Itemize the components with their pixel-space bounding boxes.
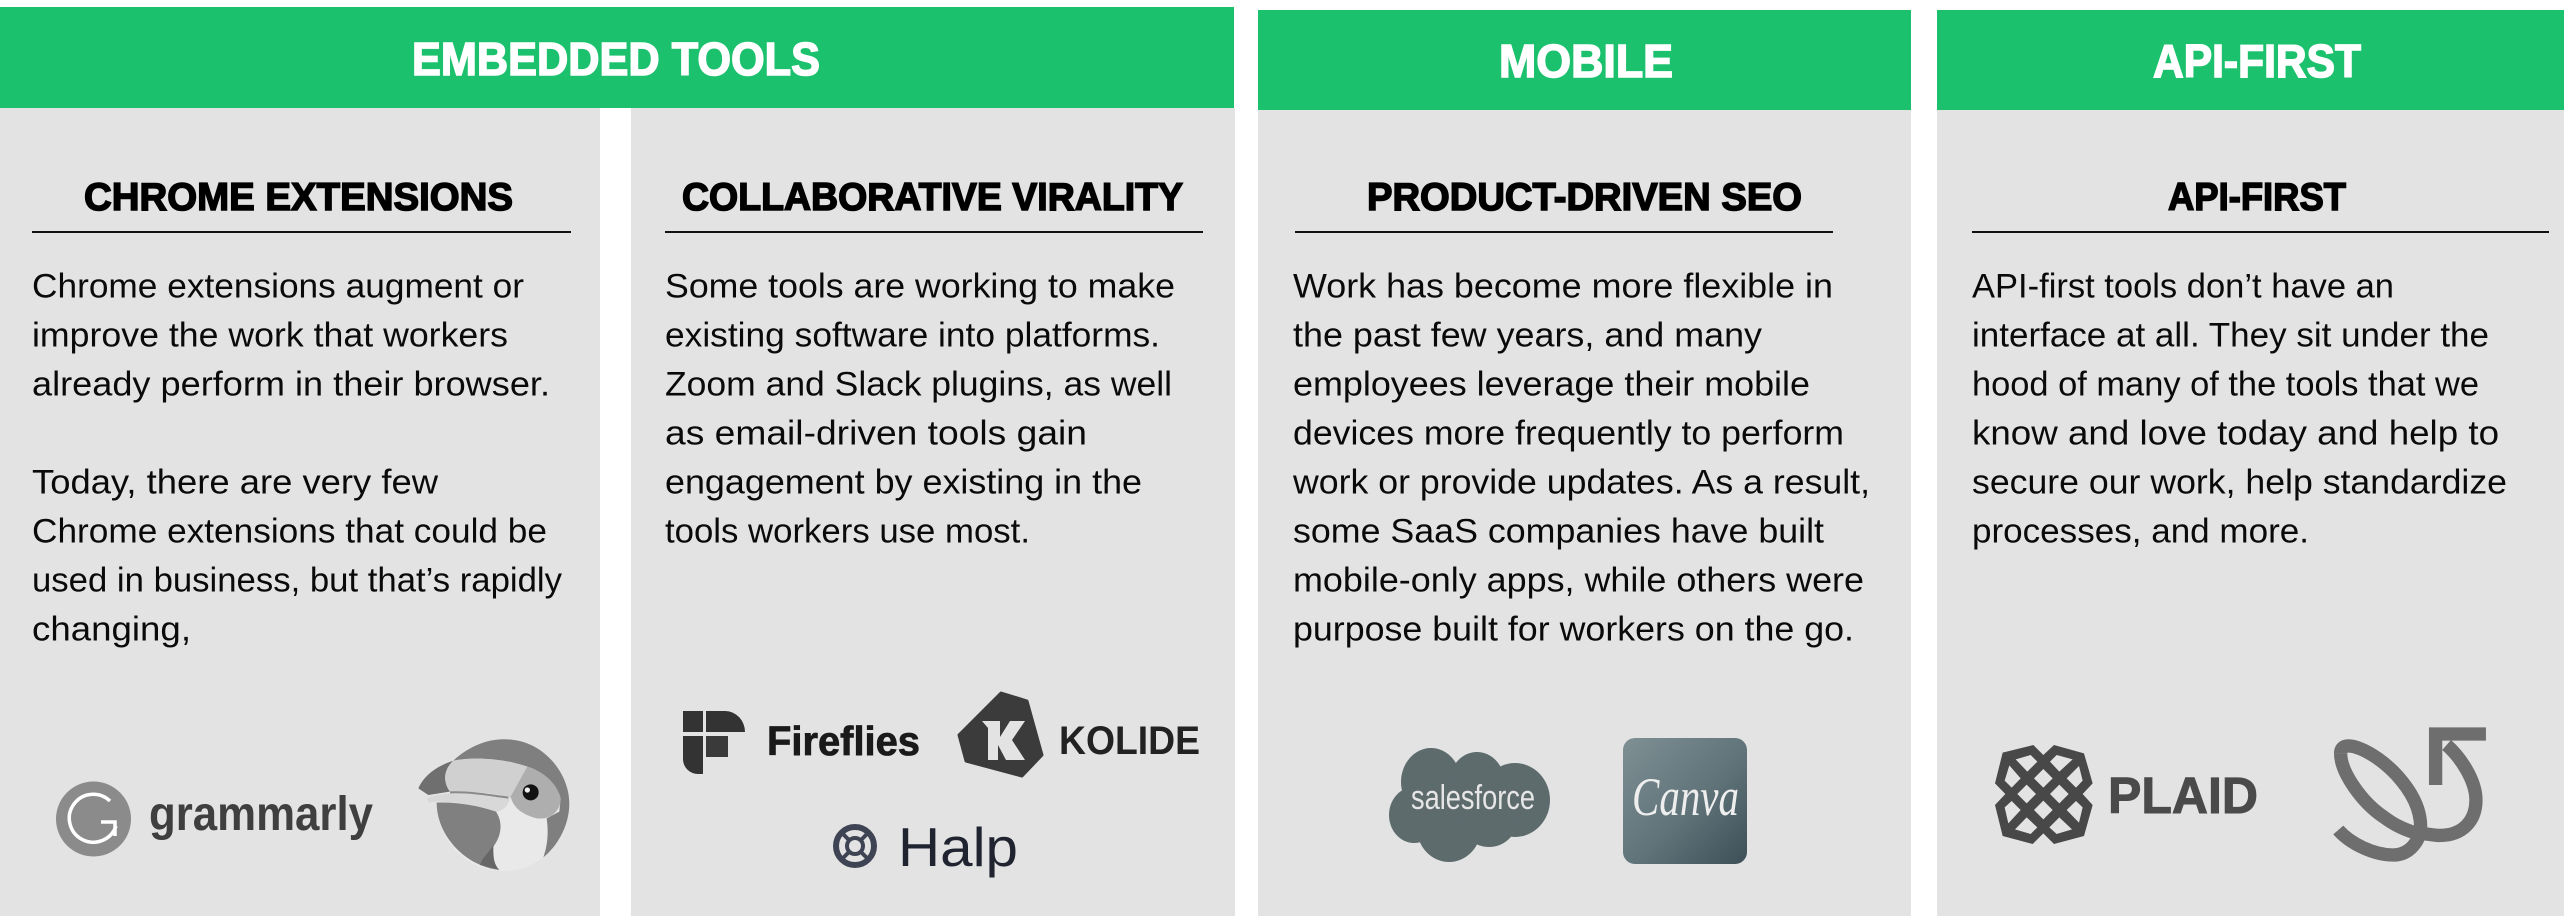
text: collaborative virality description: tools workers use most. <box>665 512 1030 550</box>
icon: kolide logo: KOLIDE <box>1059 719 1200 763</box>
text: collaborative virality description: existing software into platforms. <box>665 316 1160 354</box>
header: embedded tools <box>0 7 1234 108</box>
text: collaborative virality description <box>665 268 1175 550</box>
icon: kolide logo <box>959 693 1200 776</box>
text: collaborative virality description: engagement by existing in the <box>665 464 1142 502</box>
text: collaborative virality description: as email-driven tools gain <box>665 414 1087 452</box>
panel: api-first <box>1937 110 2564 916</box>
icon: plaid logo: PLAID <box>2108 767 2258 824</box>
icon: canva logo <box>1623 738 1747 864</box>
heading: product-driven seo: PRODUCT-DRIVEN SEO <box>1367 176 1802 219</box>
icon: fireflies logo <box>683 711 920 774</box>
text: chrome extensions description: improve the work that workers <box>32 316 508 354</box>
text: chrome extensions description <box>32 268 563 648</box>
text: api-first description: API-first tools don’t have an <box>1972 268 2394 306</box>
text: chrome extensions description: used in business, but that’s rapidly <box>32 562 563 600</box>
text: api-first description: interface at all. They sit under the <box>1972 316 2489 354</box>
text: chrome extensions description: Chrome extensions augment or <box>32 268 524 306</box>
heading: api-first: API-FIRST <box>2168 176 2346 219</box>
text: api-first description: secure our work, help standardize <box>1972 464 2507 502</box>
text: product-driven seo description: some SaaS companies have built <box>1293 512 1824 550</box>
text: product-driven seo description: devices more frequently to perform <box>1293 414 1844 452</box>
text: product-driven seo description: Work has become more flexible in <box>1293 268 1833 306</box>
text: collaborative virality description: Zoom and Slack plugins, as well <box>665 366 1172 404</box>
text: product-driven seo description: employees leverage their mobile <box>1293 366 1810 404</box>
header: api-first <box>1937 10 2564 110</box>
header: mobile: MOBILE <box>1499 35 1673 87</box>
icon: plaid logo <box>1995 745 2258 844</box>
icon: grammarly logo: grammarly <box>149 788 373 841</box>
text: api-first description <box>1972 268 2507 550</box>
heading: chrome extensions: CHROME EXTENSIONS <box>84 176 513 219</box>
icon: halp logo: Halp <box>898 816 1018 878</box>
text: api-first description: processes, and more. <box>1972 512 2309 550</box>
icon: fireflies logo: Fireflies <box>767 718 920 764</box>
header: api-first: API-FIRST <box>2153 35 2361 87</box>
icon: canva logo: Canva <box>1632 767 1739 827</box>
header: mobile <box>1258 10 1911 110</box>
icon: salesforce logo: salesforce <box>1411 779 1535 817</box>
heading: collaborative virality: COLLABORATIVE VIRALITY <box>682 176 1183 219</box>
icon: salesforce logo <box>1389 748 1550 862</box>
text: api-first description: know and love today and help to <box>1972 414 2499 452</box>
text: product-driven seo description: work or provide updates. As a result, <box>1292 464 1870 502</box>
icon: halp logo <box>836 816 1018 878</box>
text: collaborative virality description: Some tools are working to make <box>665 268 1175 306</box>
text: api-first description: hood of many of the tools that we <box>1972 366 2479 404</box>
text: chrome extensions description: changing, <box>32 610 191 648</box>
text: chrome extensions description: Chrome extensions that could be <box>32 512 547 550</box>
text: chrome extensions description: Today, there are very few <box>32 464 438 502</box>
icon: grammarly logo <box>56 782 373 856</box>
text: product-driven seo description: mobile-only apps, while others were <box>1293 562 1864 600</box>
text: chrome extensions description: already perform in their browser. <box>32 366 550 404</box>
panel: collaborative virality <box>631 108 1235 916</box>
text: product-driven seo description <box>1292 268 1870 648</box>
text: product-driven seo description: purpose built for workers on the go. <box>1293 610 1854 648</box>
icon: arrow loop logo <box>2338 734 2486 855</box>
panel: chrome extensions <box>0 108 600 916</box>
icon: toucan logo <box>418 739 569 871</box>
text: product-driven seo description: the past few years, and many <box>1293 316 1763 354</box>
header: embedded tools: EMBEDDED TOOLS <box>412 33 820 85</box>
panel: product-driven seo <box>1258 110 1911 916</box>
